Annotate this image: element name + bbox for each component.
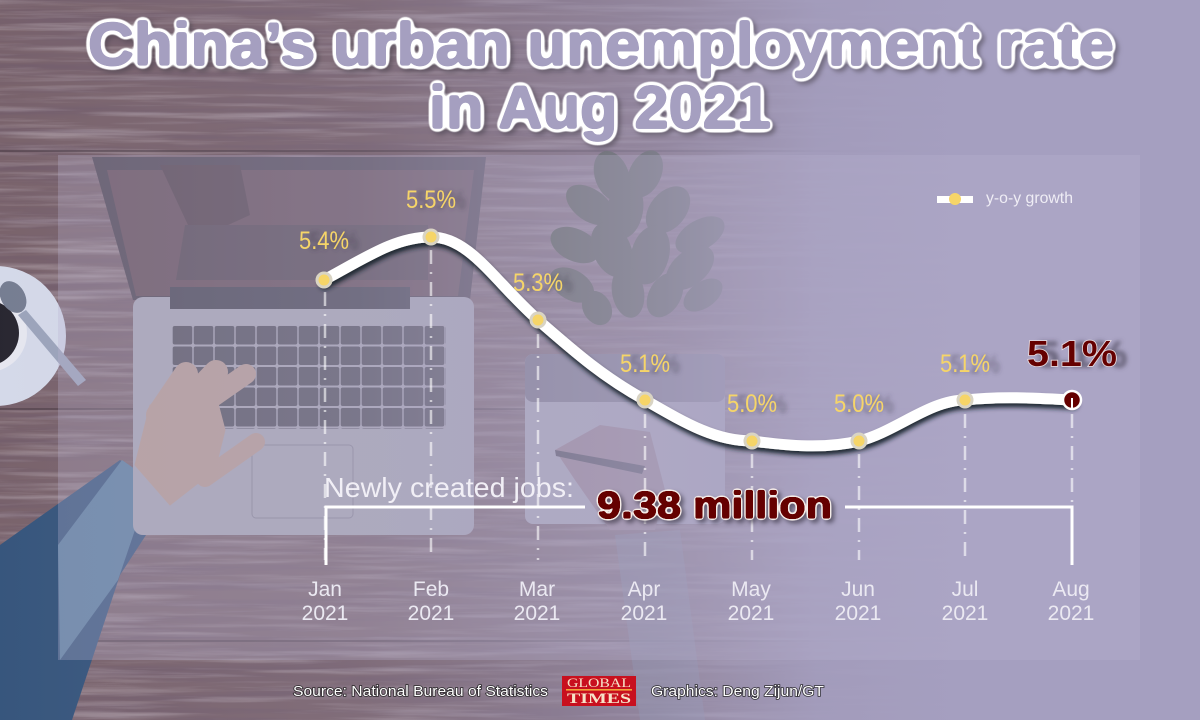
month axis labels: 2021 xyxy=(514,602,560,625)
dashed month guide lines xyxy=(325,250,1072,560)
laptop xyxy=(92,157,486,535)
highlighted August marker xyxy=(1063,391,1081,409)
curve line xyxy=(324,237,1072,446)
month axis labels: Apr xyxy=(628,578,660,601)
data value labels: 5.3% xyxy=(513,269,563,297)
jobs figure: 9.38 million xyxy=(597,485,832,527)
newly created jobs label: Newly created jobs: xyxy=(324,472,574,503)
line chart: y-o-y growth curve xyxy=(317,230,1081,448)
month axis labels: 2021 xyxy=(621,602,667,625)
month axis labels: 2021 xyxy=(835,602,881,625)
data value labels: 5.4% xyxy=(299,227,349,255)
data value labels: 5.0% xyxy=(727,390,777,418)
jobs bracket xyxy=(326,507,1072,565)
month axis labels: 2021 xyxy=(942,602,988,625)
title: China’s urban unemployment rate xyxy=(88,11,1114,78)
month axis labels: Feb xyxy=(413,578,449,601)
Global Times logo xyxy=(562,675,636,707)
potted plant xyxy=(544,145,731,331)
month axis labels: Aug xyxy=(1052,578,1090,601)
data point markers xyxy=(317,230,972,448)
month axis labels: 2021 xyxy=(302,602,348,625)
tablet with pen and hand xyxy=(525,354,725,720)
data value labels: 5.0% xyxy=(834,390,884,418)
title: in Aug 2021 xyxy=(429,74,771,141)
sleeve and arm xyxy=(0,460,172,720)
graphics credit: Graphics: Deng Zijun/GT xyxy=(651,683,824,700)
month axis labels xyxy=(302,578,1094,625)
data value labels: 5.5% xyxy=(406,186,456,214)
title xyxy=(88,11,1114,141)
month axis labels: 2021 xyxy=(1048,602,1094,625)
month axis labels: 2021 xyxy=(728,602,774,625)
month axis labels: Jul xyxy=(952,578,978,601)
data value labels xyxy=(299,186,990,418)
Global Times logo: TIMES xyxy=(567,691,631,707)
month axis labels: May xyxy=(731,578,771,601)
month axis labels: Jan xyxy=(308,578,342,601)
translucent chart panel xyxy=(58,155,1140,660)
hand on keyboard xyxy=(135,372,256,505)
month axis labels: Mar xyxy=(519,578,555,601)
month axis labels: Jun xyxy=(841,578,875,601)
month axis labels: 2021 xyxy=(408,602,454,625)
source credit: Source: National Bureau of Statistics xyxy=(293,683,548,700)
legend: y-o-y growth: y-o-y growth xyxy=(986,190,1073,207)
data value labels: 5.1% xyxy=(940,350,990,378)
Global Times logo: GLOBAL xyxy=(567,675,631,690)
legend: y-o-y growth xyxy=(937,190,1073,207)
highlighted August value: 5.1% xyxy=(1027,333,1117,374)
coffee cup on saucer xyxy=(0,266,86,406)
data value labels: 5.1% xyxy=(620,350,670,378)
